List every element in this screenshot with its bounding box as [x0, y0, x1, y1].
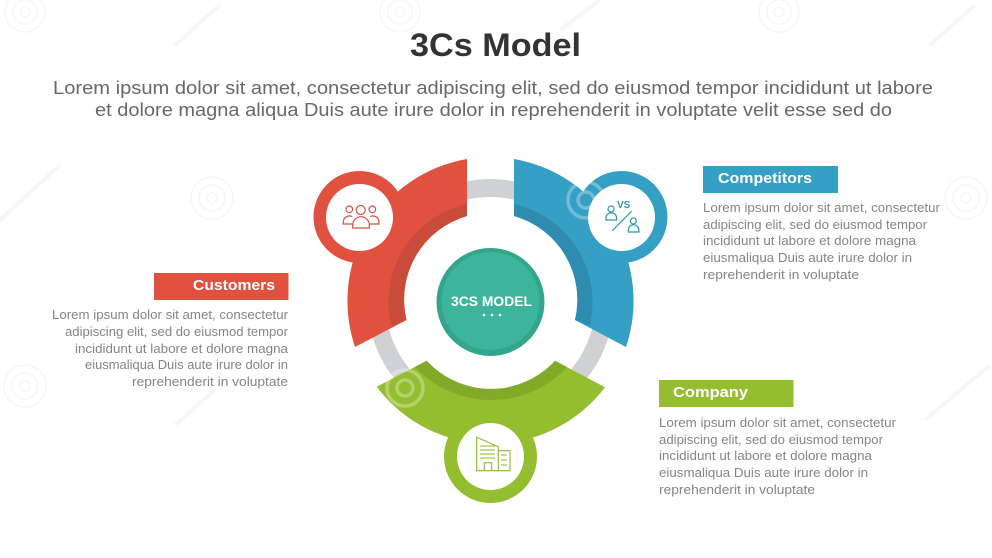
centre dots — [483, 314, 501, 316]
competitors description: reprehenderit in voluptate — [703, 268, 859, 282]
panel: company text — [659, 380, 896, 497]
centre label: 3CS MODEL — [451, 294, 532, 309]
panel: competitors segment — [514, 159, 668, 347]
title: 3Cs Model — [410, 27, 581, 63]
centre inner disc — [442, 252, 540, 350]
blue arc inner shade — [514, 204, 593, 326]
blue arc — [514, 159, 634, 347]
customers description — [52, 308, 288, 389]
white icon disc — [588, 184, 655, 251]
company label bar — [659, 380, 794, 407]
green arc inner shade — [415, 361, 567, 400]
red arc — [347, 159, 467, 347]
panel: centre circle — [436, 248, 544, 356]
company description: incididunt ut labore et dolore magna — [659, 449, 872, 463]
company description — [659, 416, 896, 497]
icon: buildings — [477, 437, 510, 471]
panel: competitors text — [703, 166, 940, 282]
competitors label bar — [703, 166, 838, 193]
blue watermark spiral — [568, 182, 604, 218]
competitors label: Competitors — [718, 171, 812, 187]
customers description: incididunt ut labore et dolore magna — [75, 342, 288, 356]
icon: versus — [606, 200, 639, 232]
competitors description — [703, 201, 940, 282]
competitors description: eiusmaliqua Duis aute irure dolor in — [703, 251, 912, 265]
company description: reprehenderit in voluptate — [659, 483, 815, 497]
competitors description: incididunt ut labore et dolore magna — [703, 234, 916, 248]
competitors description: adipiscing elit, sed do eiusmod tempor — [703, 218, 927, 232]
company description: adipiscing elit, sed do eiusmod tempor — [659, 433, 883, 447]
customers description: eiusmaliqua Duis aute irure dolor in — [85, 358, 288, 372]
panel: customers text — [52, 273, 288, 389]
panel: customers segment — [314, 159, 467, 347]
centre outer disc — [436, 248, 544, 356]
subtitle: Lorem ipsum dolor sit amet, consectetur adipiscing elit, sed do eiusmod tempor incididunt ut labore — [53, 78, 933, 98]
company description: eiusmaliqua Duis aute irure dolor in — [659, 466, 868, 480]
panel: company segment — [377, 361, 605, 503]
customers label bar — [154, 273, 288, 300]
customers label: Customers — [193, 278, 275, 294]
icon: people — [343, 206, 379, 228]
customers description: Lorem ipsum dolor sit amet, consectetur — [52, 308, 288, 322]
green arc — [377, 361, 605, 444]
grey ring — [376, 188, 604, 416]
icon: versus: VS — [617, 200, 631, 211]
white icon disc — [326, 184, 393, 251]
subtitle — [53, 78, 933, 120]
red badge circle — [314, 171, 406, 263]
white icon disc — [457, 423, 524, 490]
green badge circle — [444, 410, 537, 503]
blue badge circle — [576, 171, 668, 263]
company label: Company — [673, 385, 748, 401]
customers description: adipiscing elit, sed do eiusmod tempor — [65, 325, 288, 339]
red arc inner shade — [388, 204, 467, 326]
competitors description: Lorem ipsum dolor sit amet, consectetur — [703, 201, 940, 215]
subtitle: et dolore magna aliqua Duis aute irure dolor in reprehenderit in voluptate velit esse sed do — [95, 100, 892, 120]
watermark spirals on shapes — [387, 370, 792, 410]
company description: Lorem ipsum dolor sit amet, consectetur — [659, 416, 896, 430]
customers description: reprehenderit in voluptate — [132, 375, 288, 389]
